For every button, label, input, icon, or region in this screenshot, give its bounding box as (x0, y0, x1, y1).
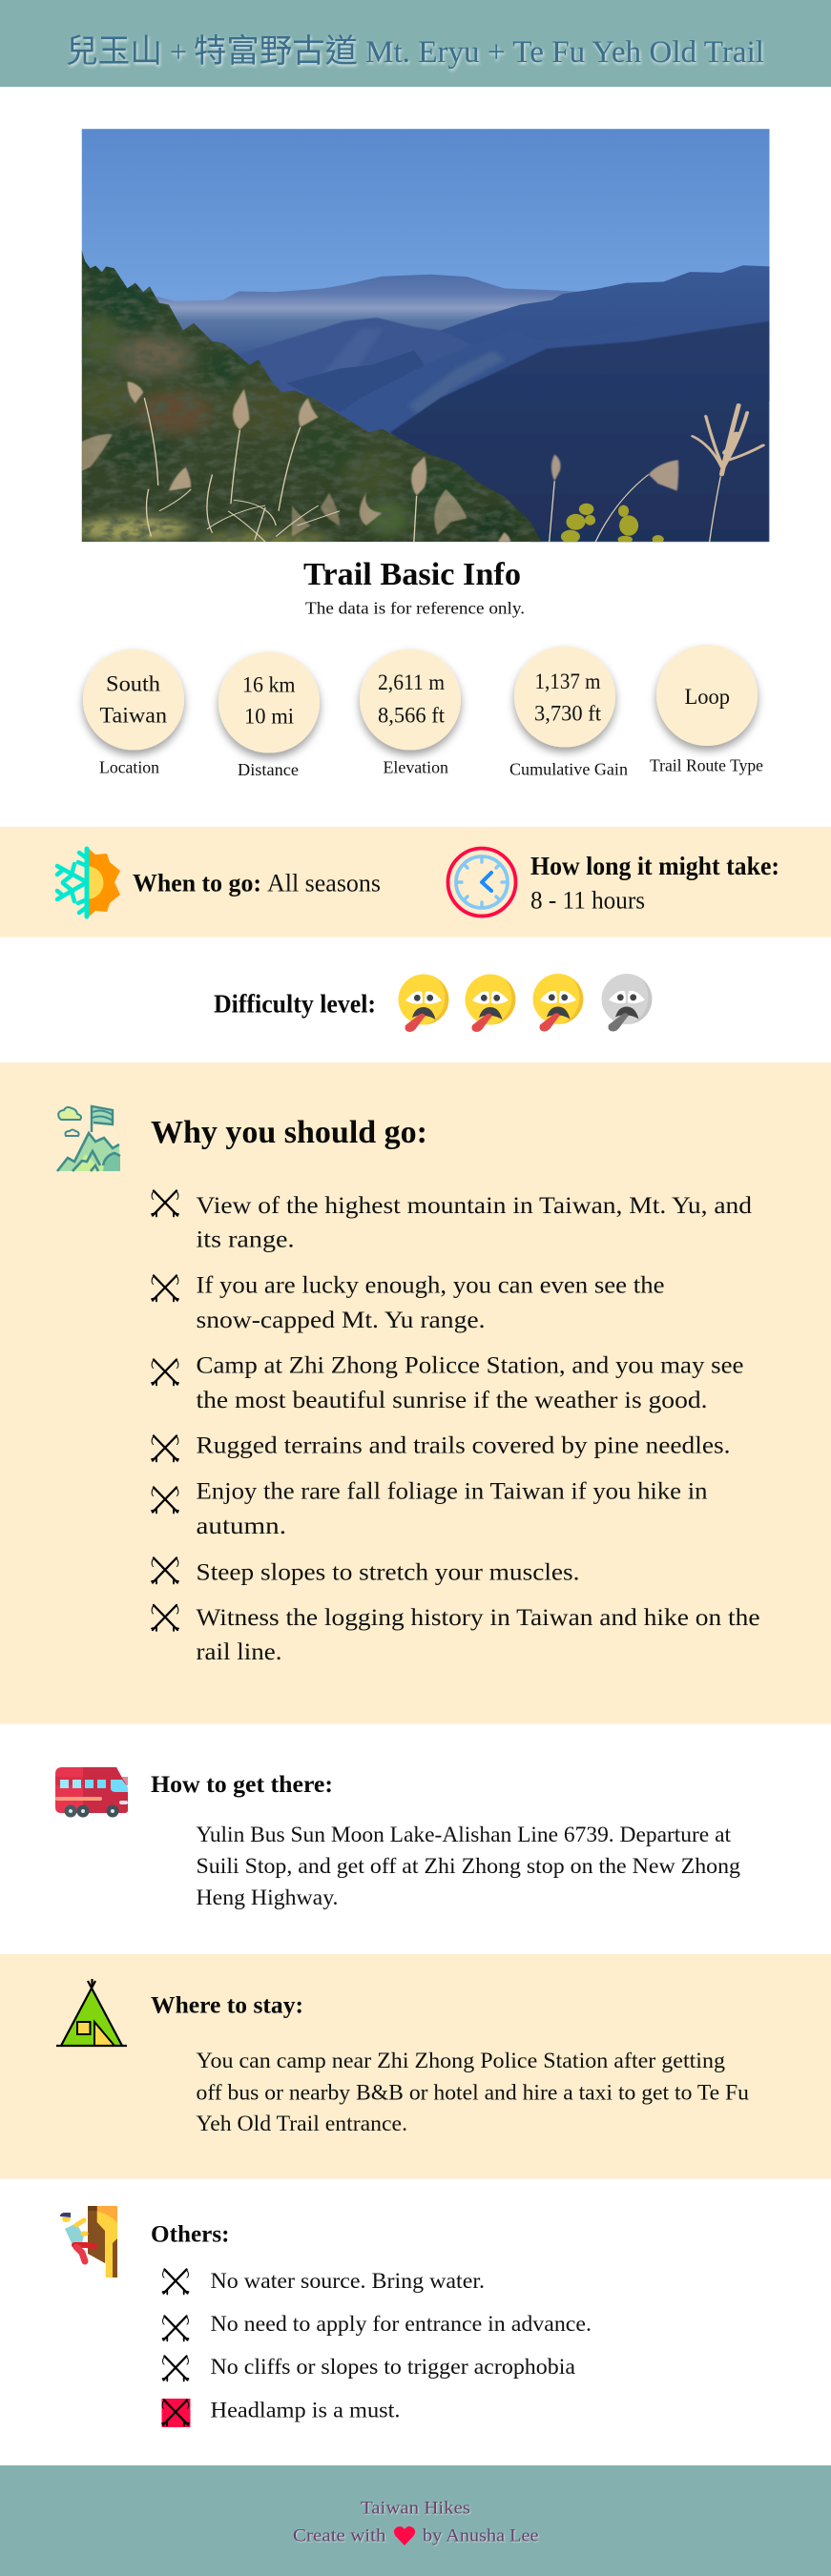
icon: mountain with flag (57, 1106, 120, 1171)
stat: trail route type: Trail Route Type (650, 755, 763, 774)
section: trail basic info (83, 557, 763, 779)
bullet: camp and sunrise: Camp at Zhi Zhong Policce Station, and you may see (197, 1350, 744, 1379)
heading: Where to stay: (151, 1993, 303, 2018)
bullet: camp and sunrise: the most beautiful sunrise if the weather is good. (197, 1386, 708, 1413)
icon: tired face 3 (532, 974, 584, 1032)
stat: elevation: Elevation (384, 757, 448, 776)
text: how long it might take (530, 852, 779, 914)
title: 特富野古道 (194, 25, 358, 72)
stat: location (83, 649, 184, 776)
subheading: The data is for reference only. (305, 599, 525, 618)
bullet: highest mountain: View of the highest mountain in Taiwan, Mt. Yu, and (197, 1191, 752, 1219)
text: when to go: All seasons (267, 870, 381, 896)
yellow leaves (561, 504, 664, 544)
bullet: snow-capped range: If you are lucky enough, you can even see the (197, 1270, 664, 1299)
bullet: logging history: rail line. (197, 1638, 282, 1665)
difficulty rating (214, 974, 653, 1032)
credit: taiwan hikes: Taiwan Hikes (361, 2499, 470, 2518)
bullet: logging history: Witness the logging history in Taiwan and hike on the (197, 1603, 759, 1631)
stat: cumulative gain: Cumulative Gain (509, 759, 628, 778)
paragraph: Yeh Old Trail entrance. (197, 2112, 407, 2135)
item: acrophobia: No cliffs or slopes to trigger acrophobia (210, 2355, 575, 2379)
paragraph: off bus or nearby B&B or hotel and hire a taxi to get to Te Fu (197, 2080, 750, 2104)
bullet: fall foliage: autumn. (197, 1512, 286, 1539)
stat: distance: 16 km (242, 673, 296, 696)
bullet: fall foliage: Enjoy the rare fall foliage in Taiwan if you hike in (197, 1476, 708, 1505)
header banner (0, 0, 831, 87)
item: water: No water source. Bring water. (210, 2269, 485, 2293)
stat: trail route type: Loop (685, 685, 730, 709)
title: Mt. Eryu + Te Fu Yeh Old Trail (365, 35, 764, 70)
bullet: fall foliage (152, 1476, 708, 1539)
text: how long it might take: How long it might take: (530, 852, 779, 880)
section: how to get there (55, 1767, 741, 1909)
title: + (170, 35, 187, 70)
heading: Trail Basic Info (303, 557, 521, 592)
stat: elevation: 8,566 ft (378, 704, 446, 727)
icon: clock (448, 849, 515, 916)
icon: tired face 2 (466, 975, 515, 1032)
title: 兒玉山 (66, 25, 162, 72)
paragraph (197, 1823, 741, 1909)
icon: tent (56, 1979, 127, 2046)
bullet: steep slopes: Steep slopes to stretch your muscles. (197, 1557, 580, 1585)
photo: mountain panorama (74, 129, 769, 547)
bullet: snow-capped range: snow-capped Mt. Yu range. (197, 1306, 485, 1333)
text: how long it might take: 8 - 11 hours (530, 887, 645, 914)
bullet: rugged terrain: Rugged terrains and trails covered by pine needles. (197, 1431, 731, 1459)
stat: elevation (360, 649, 461, 776)
stat: cumulative gain (509, 647, 628, 778)
right plume (693, 405, 763, 475)
paragraph: Heng Highway. (197, 1886, 338, 1909)
icon: tired face grey (601, 974, 653, 1032)
label: Difficulty level: (214, 990, 376, 1019)
panel: when to go and duration (0, 827, 831, 937)
item: entrance: No need to apply for entrance in advance. (210, 2312, 592, 2336)
stat: cumulative gain: 1,137 m (534, 670, 601, 693)
bullet: logging history (152, 1603, 759, 1665)
paragraph: Suili Stop, and get off at Zhi Zhong stop on the New Zhong (197, 1854, 741, 1878)
bullet: highest mountain: its range. (197, 1225, 294, 1253)
stat: distance: Distance (238, 760, 299, 779)
stat: elevation: 2,611 m (378, 670, 445, 694)
icon: bus (55, 1767, 128, 1818)
icon: rock climber (60, 2206, 117, 2277)
stat: location: Location (99, 757, 159, 776)
panel: why you should go (0, 1062, 831, 1724)
stat: cumulative gain: 3,730 ft (534, 702, 602, 725)
credit: author: Create with (293, 2525, 386, 2546)
heading: How to get there: (151, 1772, 333, 1798)
text: when to go (133, 870, 381, 896)
heading: Why you should go: (151, 1115, 427, 1150)
bullet: highest mountain (152, 1190, 752, 1253)
section: others (60, 2206, 592, 2427)
heading: Others: (151, 2222, 229, 2247)
stat: trail route type (650, 645, 763, 774)
paragraph: Yulin Bus Sun Moon Lake-Alishan Line 6739. Departure at (197, 1823, 732, 1846)
stat: distance: 10 mi (244, 704, 294, 729)
icon: tired face 1 (399, 975, 448, 1032)
credit: author: by Anusha Lee (423, 2525, 538, 2546)
text: when to go: When to go: (133, 870, 261, 896)
bullet: snow-capped range (152, 1270, 664, 1333)
item: headlamp: Headlamp is a must. (210, 2398, 401, 2422)
paragraph: You can camp near Zhi Zhong Police Station after getting (197, 2049, 726, 2072)
stat: distance (218, 652, 320, 779)
item: headlamp (162, 2398, 401, 2427)
credit: author (293, 2525, 538, 2546)
panel: where to stay (0, 1954, 831, 2178)
title (66, 25, 764, 72)
pampas grass plumes (82, 381, 678, 542)
icon: sun and snowflake (57, 847, 120, 918)
bullet: camp and sunrise (152, 1350, 744, 1413)
footer (0, 2465, 831, 2576)
stat: location: South (106, 671, 161, 696)
paragraph (197, 2049, 750, 2135)
stat: location: Taiwan (99, 704, 168, 727)
